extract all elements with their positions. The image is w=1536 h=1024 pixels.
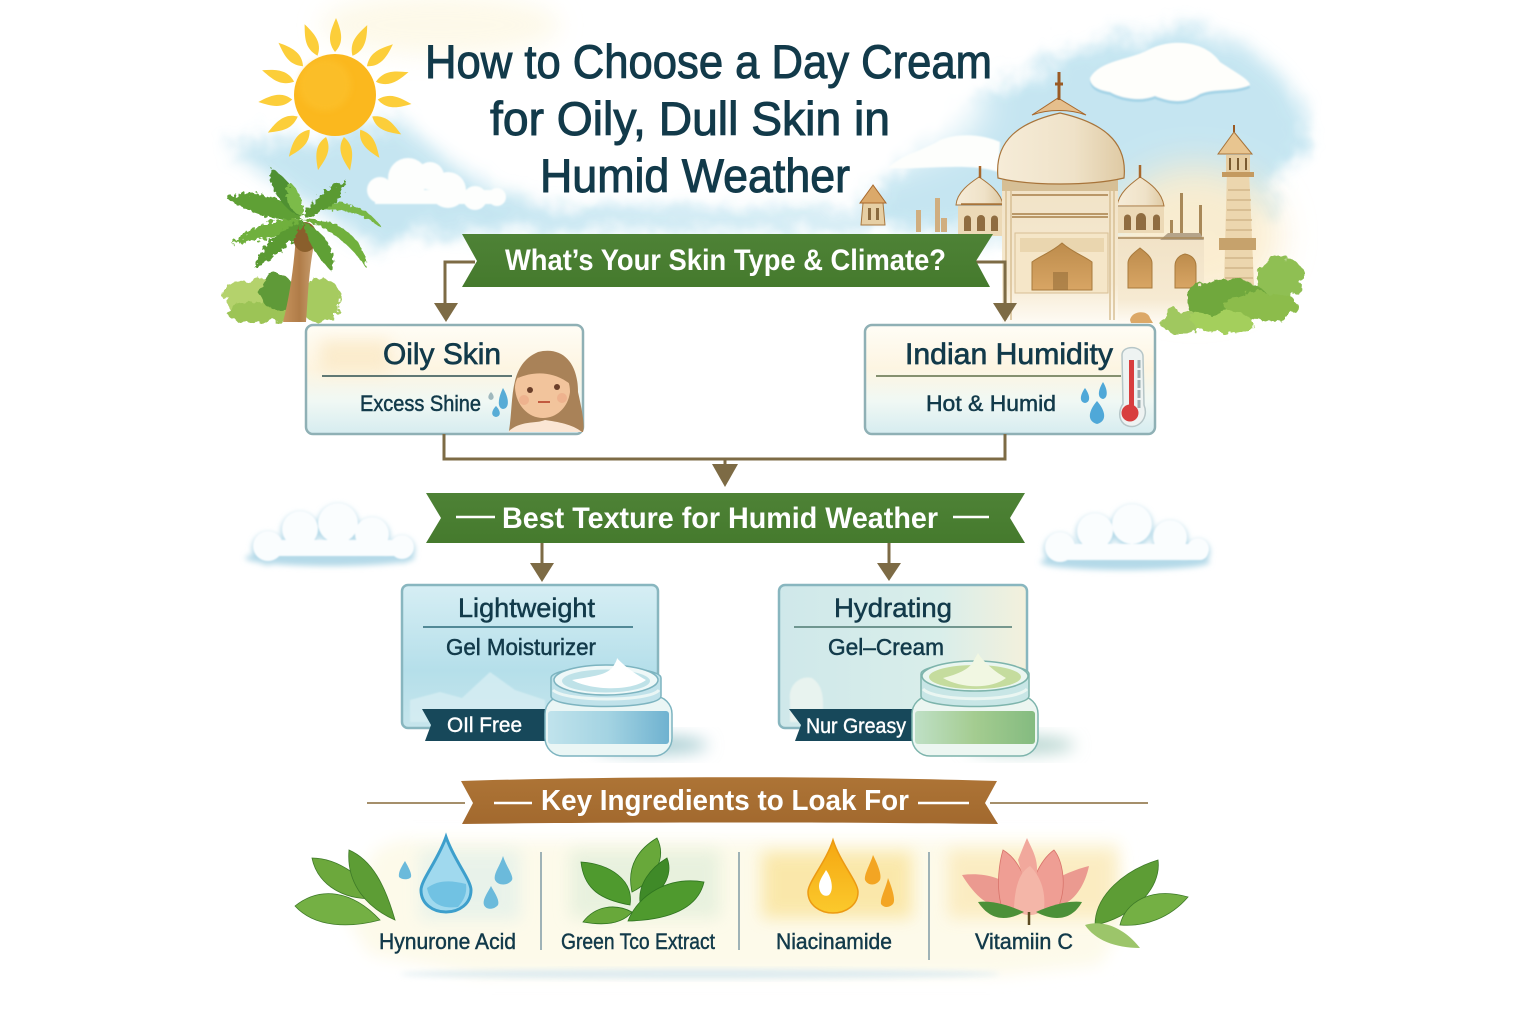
cloud: beside sun [367, 158, 506, 210]
ingredient: Hyaluronic Acid [295, 837, 516, 954]
main dome [998, 72, 1124, 184]
panel: Indian Humidity: Hot & Humid [926, 391, 1056, 416]
panel: Oily Skin [306, 325, 584, 434]
tag: Non Greasy: Nur Greasy [806, 715, 906, 738]
sky wash background [225, 0, 1310, 305]
panel: Lightweight Gel Moisturizer [402, 585, 658, 728]
ingredient: Niacinamide [776, 840, 894, 954]
icon: leaves right [1085, 860, 1188, 948]
title: How to Choose a Day Cream [425, 35, 992, 88]
banner: What's Your Skin Type & Climate? [462, 234, 993, 287]
panel: Hydrating Gel-Cream: Hydrating [834, 593, 952, 623]
label: Vitamiin C [975, 929, 1073, 954]
icon: humidity drops [1081, 382, 1107, 424]
ingredient: Vitamin C [962, 838, 1188, 954]
icon: leaves left [295, 850, 395, 925]
left small dome [956, 166, 1005, 236]
label: Niacinamide [776, 929, 892, 954]
panel: Oily Skin: Excess Shine [360, 391, 481, 416]
illustration: palm tree and bush [224, 167, 382, 323]
connector: top banner to both boxes [434, 262, 1017, 322]
icon: tea leaves [581, 838, 704, 924]
title: Humid Weather [540, 149, 850, 202]
panel: Indian Humidity [865, 325, 1155, 434]
panel: Hydrating Gel-Cream [779, 585, 1027, 728]
panel: Lightweight Gel Moisturizer: Gel Moisturizer [446, 634, 596, 660]
right wing [1116, 233, 1204, 326]
right small dome [1117, 165, 1164, 233]
icon: sun [258, 18, 412, 172]
panel: Hydrating Gel-Cream: Gel–Cream [828, 634, 944, 660]
banner: Key Ingredients [461, 777, 998, 824]
illustration: Taj Mahal [860, 72, 1304, 334]
divider lines beside ingredients banner [367, 802, 1148, 804]
panel: Indian Humidity: Indian Humidity [905, 338, 1113, 371]
cloud: mid right [1040, 504, 1210, 570]
cloud: top right [1090, 43, 1250, 104]
tag: Oil Free [422, 709, 552, 741]
main body [1002, 180, 1118, 328]
ingredient: Green Tea Extract [561, 838, 715, 954]
banner: Best Texture for Humid Weather [426, 493, 1025, 543]
banner: Best Texture for Humid Weather: Best Texture for Humid Weather [502, 502, 938, 535]
icon: blue drop [399, 837, 512, 912]
tag: Non Greasy [789, 709, 918, 741]
icon: thermometer [1120, 348, 1145, 427]
connector: banner to texture cards [530, 543, 901, 582]
panel: Oily Skin: Oily Skin [383, 338, 501, 371]
banner: What's Your Skin Type & Climate?: What’s Your Skin Type & Climate? [505, 244, 946, 277]
label: Green Tco Extract [561, 929, 715, 954]
title: for Oily, Dull Skin in [490, 92, 890, 145]
title [425, 35, 992, 202]
icon: golden drop [808, 840, 894, 913]
banner: Key Ingredients: Key Ingredients to Loak For [541, 785, 909, 817]
icon: blue gel cream jar [545, 658, 708, 756]
icon: green gel cream jar [912, 653, 1075, 756]
cloud: mid left [245, 503, 415, 566]
tag: Oil Free: OIl Free [447, 714, 522, 737]
icon: sweat drops [488, 388, 508, 417]
ingredients wash background [345, 840, 1125, 979]
icon: lotus [962, 838, 1089, 925]
spires [916, 198, 947, 232]
icon: girl with long hair [508, 351, 584, 432]
bush right [1160, 256, 1304, 334]
label: Hynurone Acid [379, 929, 516, 954]
minaret [1218, 125, 1256, 285]
ingredient dividers [541, 852, 929, 960]
small pavilion [860, 185, 886, 225]
cloud: behind dome [888, 135, 1000, 172]
panel: Lightweight Gel Moisturizer: Lightweight [458, 593, 595, 623]
connector: boxes merge to texture banner [444, 434, 1005, 487]
